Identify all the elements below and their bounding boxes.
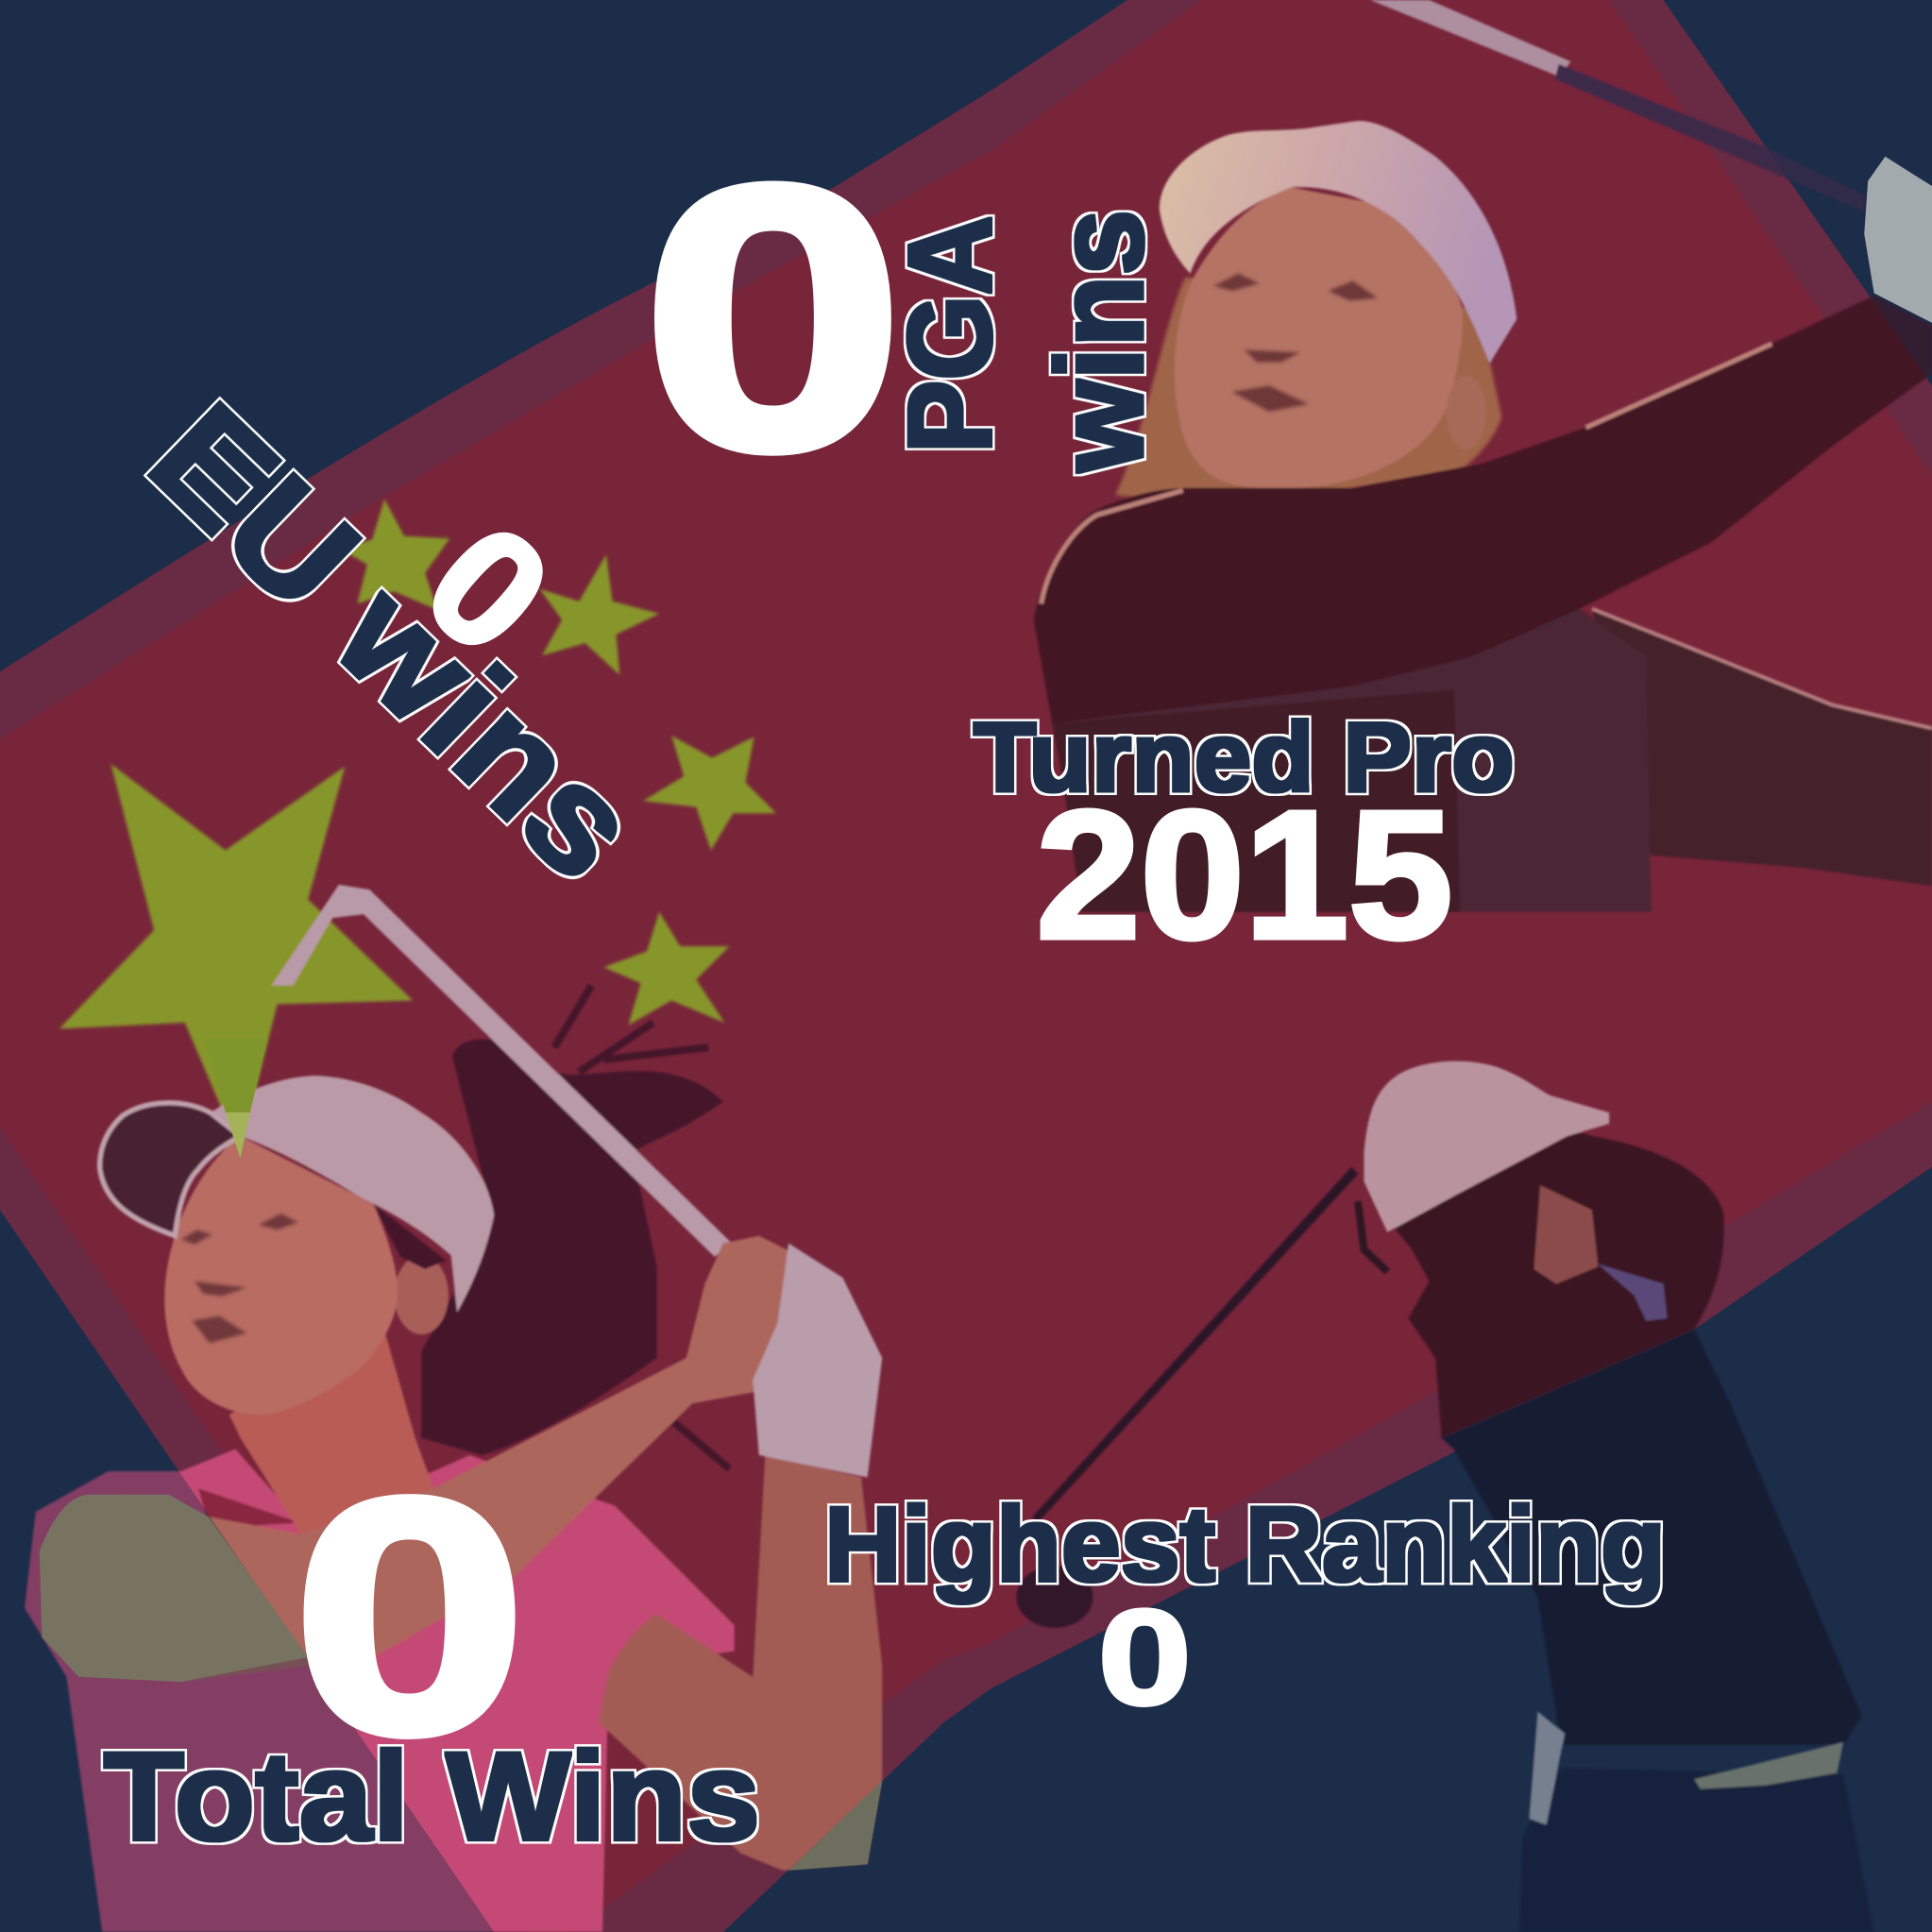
hair strands [554, 986, 729, 1468]
glove [753, 1244, 882, 1478]
wrist badge [1598, 1264, 1667, 1321]
hat [1364, 1061, 1609, 1232]
stat label: Highest Ranking: Highest Ranking [824, 1484, 1666, 1603]
collar shadow [198, 1488, 300, 1528]
stat label: Total Wins: Total Wins [104, 1727, 760, 1867]
face [1534, 1185, 1598, 1284]
facial features [1213, 274, 1378, 412]
flag stars [59, 499, 776, 1152]
face [164, 1136, 398, 1415]
small star 1 [339, 499, 449, 610]
far arm highlight [1592, 609, 1932, 728]
far forearm [599, 1455, 882, 1871]
small star 4 [603, 912, 729, 1025]
club head [1016, 1566, 1093, 1628]
stat label: EU wins: EU wins [119, 372, 669, 910]
stat label: Turned Pro: Turned Pro [974, 703, 1515, 813]
club [271, 885, 732, 1257]
ear [395, 1256, 449, 1334]
hat [211, 1076, 494, 1313]
stat label: wins: wins [1031, 210, 1169, 473]
stat: EU wins number: 0 [391, 490, 584, 689]
player bottom left [25, 885, 882, 1932]
near arm [1034, 296, 1932, 723]
belt [1694, 1742, 1843, 1789]
facial features [181, 1213, 298, 1343]
hair [421, 1040, 723, 1455]
face [1175, 187, 1463, 488]
club shaft [1032, 1167, 1358, 1523]
torso [1442, 1330, 1862, 1745]
arm highlights [1042, 344, 1771, 603]
elbow grey section [788, 1781, 882, 1871]
player bottom right [1016, 1061, 1724, 1628]
neck [229, 1334, 433, 1534]
trousers [1519, 1768, 1874, 1932]
club shaft [1555, 64, 1864, 212]
torso shadow [1052, 690, 1460, 912]
far arm [1592, 609, 1932, 886]
stat label: PGA: PGA [884, 215, 1016, 453]
shirt [25, 1449, 735, 1932]
torso mesh [1052, 609, 1651, 912]
ear [1447, 376, 1486, 449]
stat: total wins number: 0 [294, 1430, 526, 1802]
stat: 2015: 2015 [1036, 772, 1452, 976]
scorecard [1529, 1711, 1565, 1824]
stat: PGA wins number: 0 [642, 110, 905, 528]
player top right [1034, 0, 1932, 912]
hat brim [100, 1103, 240, 1236]
near arm [123, 1236, 843, 1682]
dark clothing and hair [1387, 1127, 1724, 1438]
rear arm grey section [40, 1495, 308, 1682]
hair [1115, 278, 1501, 505]
big star [59, 764, 413, 1152]
hair strand [1358, 1201, 1387, 1272]
small star 3 [643, 736, 776, 850]
small star 2 [540, 554, 659, 675]
glove on navy [1864, 157, 1932, 323]
club head [1370, 0, 1571, 76]
hair by ear [373, 1204, 446, 1269]
stat: highest ranking number: 0 [1098, 1583, 1192, 1734]
hat [1160, 121, 1517, 364]
star tip over hat [205, 1039, 267, 1159]
player bottom right: torso on navy [1442, 1330, 1874, 1932]
